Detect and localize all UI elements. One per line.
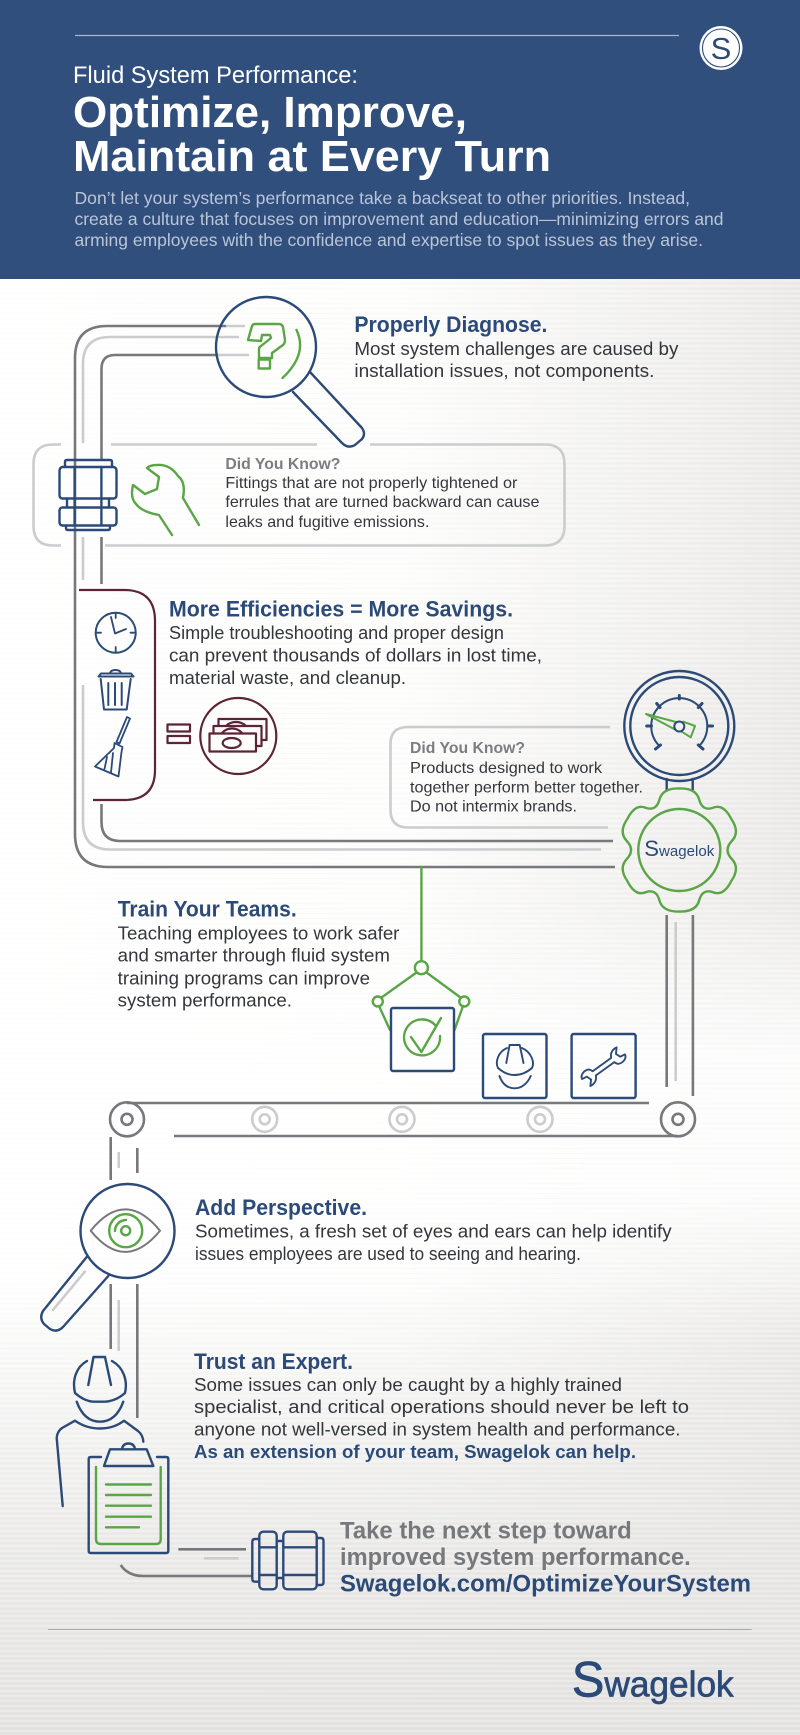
icon: magnifier with eye [41,1184,174,1331]
text: trust an expert [194,1349,689,1462]
pipe run: upper left loop [75,326,615,867]
icon: trash can [98,670,134,710]
conveyor belt [110,1102,695,1136]
text: train your teams: Teaching employees to work safer [118,923,399,943]
text: add perspective: Sometimes, a fresh set of eyes and ears can help identify [195,1222,672,1242]
main title: Optimize, Improve, [73,89,467,137]
text: did you know 2: Did You Know? [410,740,525,757]
intro paragraph [74,188,724,250]
icon: pressure gauge [624,671,734,790]
Swagelok logo: Swagelok [572,1652,735,1708]
intro paragraph: arming employees with the confidence and expertise to spot issues as they arise. [74,230,703,250]
text: did you know 2: Do not intermix brands. [410,799,577,816]
icon: wrench [132,465,199,535]
panel: header banner [0,0,800,279]
text: add perspective [195,1195,672,1264]
text: add perspective: Add Perspective. [195,1195,367,1220]
pipe: gauge to conveyor [667,915,693,1096]
text: trust an expert: specialist, and critical operations should never be left to [194,1397,689,1417]
icon: money circle [200,698,276,774]
text: more efficiencies [169,597,542,688]
call to action: Take the next step toward [340,1517,632,1544]
eyebrow title: Fluid System Performance: [73,62,358,89]
main title: Maintain at Every Turn [73,133,551,181]
icon: green valve handle [623,788,736,912]
icon: clock [96,613,136,653]
text: properly diagnose: Properly Diagnose. [354,312,547,337]
card: hard hat [483,1034,546,1098]
text: more efficiencies: Simple troubleshooting and proper design [169,623,504,643]
text: did you know 2: together perform better together. [410,780,643,797]
clipboard [89,1457,168,1553]
icon: green valve handle: Swagelok [644,836,715,861]
text: trust an expert: As an extension of your team, Swagelok can help. [194,1442,636,1462]
text: train your teams [118,897,399,1011]
call to action [340,1517,751,1598]
worker hard hat and shoulders [57,1357,143,1506]
intro paragraph: create a culture that focuses on improvement and education—minimizing errors and [74,209,724,229]
text: more efficiencies: More Efficiencies = More Savings. [169,597,513,622]
text: did you know 1 [225,456,540,531]
icon: pipe fitting [60,460,116,530]
text: did you know 1: Did You Know? [225,456,340,473]
text: trust an expert: Trust an Expert. [194,1349,353,1374]
main title [73,89,551,181]
gauge needle [646,714,695,737]
text: properly diagnose: Most system challenges are caused by [354,339,678,359]
text: add perspective: issues employees are used to seeing and hearing. [195,1244,581,1264]
panel: did you know 2 [390,727,643,828]
text: did you know 1: leaks and fugitive emissions. [225,514,429,531]
text: trust an expert: Some issues can only be caught by a highly trained [194,1375,622,1395]
text: train your teams: and smarter through fluid system [118,946,390,966]
icon: worker with clipboard [57,1357,168,1553]
card: spanner [572,1034,636,1098]
pipe: clipboard to end fitting [121,1549,252,1576]
text: properly diagnose [354,312,678,381]
text: properly diagnose: installation issues, not components. [354,361,654,381]
text: train your teams: system performance. [118,991,292,1011]
text: did you know 1: ferrules that are turned backward can cause [225,494,540,511]
icon: magnifier with question mark [216,297,364,447]
text: did you know 1: Fittings that are not properly tightened or [225,475,518,492]
call to action: Swagelok.com/OptimizeYourSystem [340,1571,751,1598]
intro paragraph: Don’t let your system’s performance take a backseat to other priorities. Instead, [74,188,690,208]
icon: end fitting [252,1532,324,1589]
icon: Swagelok S badge [700,26,742,70]
pipe: conveyor to worker [111,1137,137,1418]
icon: crane hook [373,867,469,1030]
icon: equals sign [168,724,190,743]
text: train your teams: training programs can improve [118,968,370,988]
text: more efficiencies: material waste, and cleanup. [169,668,406,688]
panel: did you know 1 [34,444,564,546]
text: did you know 2: Products designed to work [410,760,603,777]
text: trust an expert: anyone not well-versed in system health and performance. [194,1420,680,1440]
text: train your teams: Train Your Teams. [118,897,297,922]
icon: broom [95,717,130,776]
icon: question mark [248,324,285,368]
card: checkmark [391,1008,454,1071]
text: did you know 2 [410,740,643,816]
panel: savings bracket [79,590,276,800]
call to action: improved system performance. [340,1544,691,1571]
icon: Swagelok S badge: S [711,31,731,66]
text: more efficiencies: can prevent thousands of dollars in lost time, [169,646,542,666]
